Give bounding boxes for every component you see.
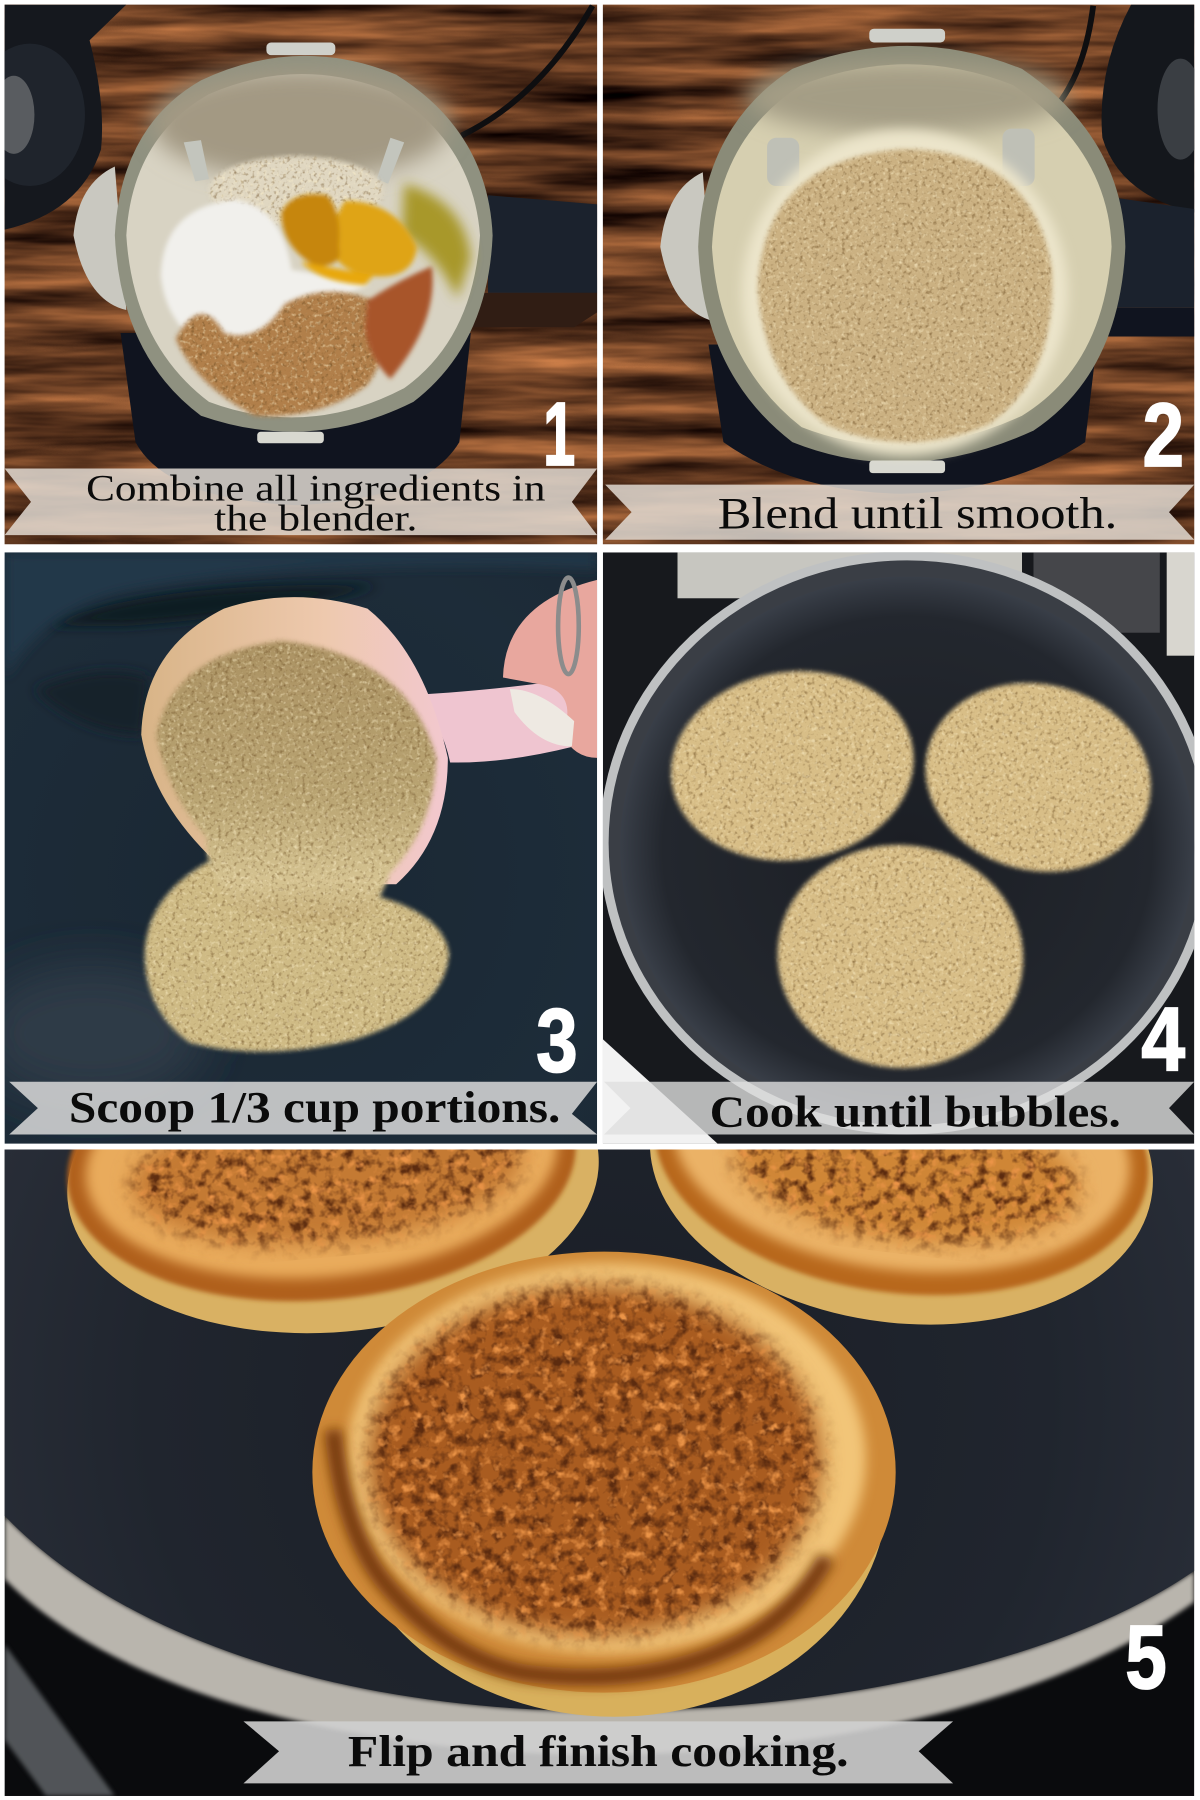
caption text: Scoop 1/3 cup portions. [69, 1082, 560, 1132]
pancake top right [905, 660, 1171, 895]
panel: step 1 combine ingredients [0, 5, 597, 544]
caption ribbon [243, 1721, 953, 1783]
panel: step 5 flip and finish [5, 972, 1194, 1796]
blender lid and cord [1059, 5, 1200, 212]
pancake upper left [54, 999, 612, 1355]
dark lower edge [333, 1430, 827, 1677]
caption text: the blender. [214, 498, 417, 539]
blender glass jar [660, 29, 1125, 473]
lower layer [341, 1264, 888, 1717]
caption ribbon [9, 1082, 597, 1135]
dark pan [5, 552, 597, 1144]
caption text: Cook until bubbles. [710, 1087, 1121, 1137]
wood table background [603, 5, 1194, 544]
measuring cup handle [428, 684, 572, 762]
pancake upper right [631, 972, 1172, 1352]
measuring cup with batter [141, 597, 448, 923]
step number 2: 2 [1143, 385, 1184, 485]
panel: step 2 blend until smooth [603, 5, 1200, 544]
cinnamon [365, 266, 433, 379]
hand holding cup [503, 578, 597, 758]
caption text: Combine all ingredients in [86, 468, 545, 509]
pale ring [347, 1263, 866, 1654]
pool of batter [145, 861, 449, 1052]
pan metal rim [5, 1516, 1194, 1755]
caption text: Flip and finish cooking. [348, 1726, 849, 1776]
pale batter ring [742, 130, 1068, 456]
dark stove background [5, 1149, 1194, 1796]
step number 5: 5 [1125, 1607, 1167, 1707]
egg yolk and white [281, 194, 417, 285]
caption ribbon [605, 485, 1194, 540]
panel: step 3 scoop batter [0, 552, 597, 1144]
pan with rim [599, 551, 1200, 1135]
caption text: Blend until smooth. [718, 488, 1117, 538]
caption ribbon [604, 1082, 1194, 1135]
step number 1: 1 [543, 384, 575, 484]
panel: step 4 cook until bubbles [599, 551, 1200, 1144]
oat flour pile [209, 156, 384, 225]
blender handle [1108, 198, 1194, 336]
blender lid and cord [0, 5, 593, 230]
white flour [159, 198, 368, 338]
large flipped pancake [312, 1252, 896, 1717]
brown sugar [176, 292, 383, 416]
oil on jar wall [402, 184, 471, 299]
seared centre [369, 1286, 821, 1635]
blender glass jar [73, 42, 493, 443]
wood table background [5, 5, 597, 544]
pan surface [5, 1149, 1194, 1711]
caption ribbon [5, 469, 597, 535]
blender base [121, 333, 471, 505]
step number 3: 3 [536, 990, 578, 1090]
blender base [709, 344, 1097, 494]
stove background [603, 552, 1194, 1144]
pancake bottom [768, 835, 1032, 1078]
smooth batter [758, 149, 1052, 442]
blender handle [473, 195, 597, 327]
golden edge [312, 1252, 896, 1693]
pancake top left [659, 656, 926, 876]
step number 4: 4 [1141, 989, 1185, 1089]
